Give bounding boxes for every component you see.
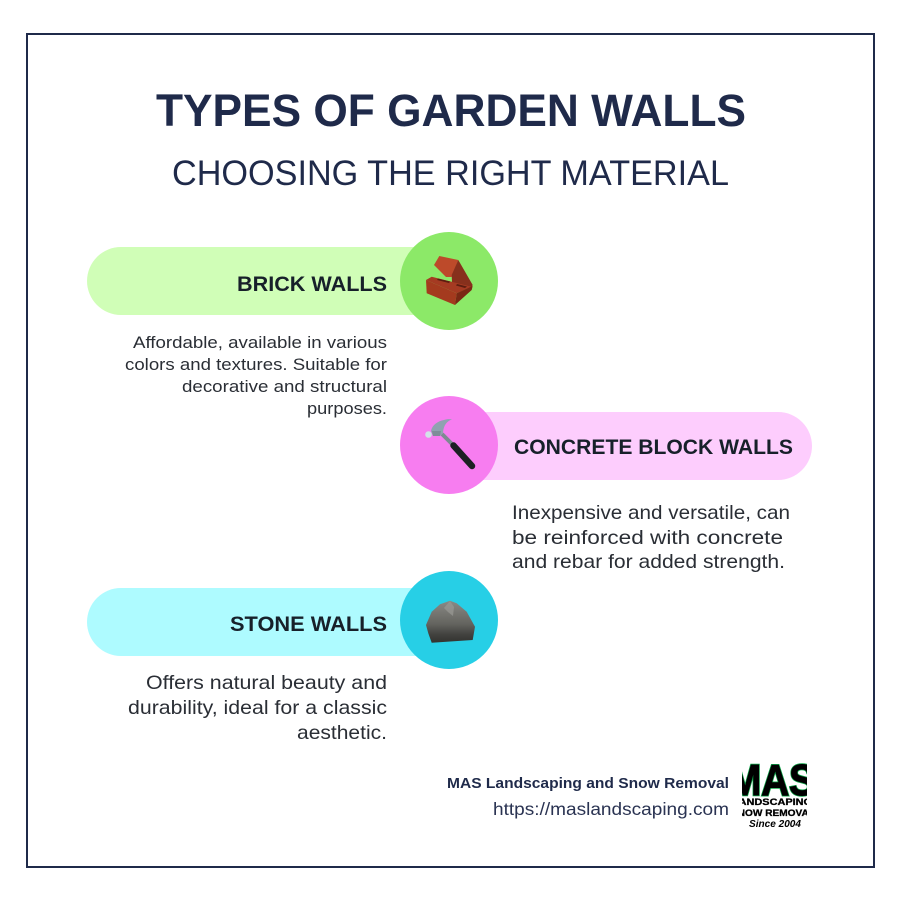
logo: MAS (729, 756, 815, 805)
icon: hammer (425, 419, 472, 466)
title: TYPES OF GARDEN WALLS (156, 85, 746, 136)
icon: stone (426, 601, 475, 643)
text: brick description: Affordable, available in various (133, 333, 387, 352)
text: brick description: purposes. (307, 399, 387, 418)
pill: concrete (450, 412, 812, 480)
icon circle: brick (400, 232, 498, 330)
text: stone description: durability, ideal for a classic (128, 697, 387, 719)
footer: company info: MAS Landscaping and Snow Removal (447, 775, 729, 792)
heading: brick walls: BRICK WALLS (237, 272, 387, 296)
panel: concrete block walls (400, 396, 812, 573)
logo: SNOW REMOVAL (731, 808, 815, 819)
text: concrete description: and rebar for added strength. (512, 551, 785, 573)
text: stone description: Offers natural beauty and (146, 672, 387, 694)
panel: brick walls (87, 232, 498, 418)
icon circle: stone (400, 571, 498, 669)
panel: stone walls (87, 571, 498, 744)
heading: stone walls: STONE WALLS (230, 612, 387, 636)
text: stone description (128, 672, 387, 744)
pill: stone (87, 588, 450, 656)
heading: concrete block walls: CONCRETE BLOCK WALLS (514, 435, 793, 459)
subtitle: CHOOSING THE RIGHT MATERIAL (172, 154, 729, 193)
logo: MAS (729, 756, 815, 805)
footer: company info: https://maslandscaping.com (493, 799, 729, 819)
text: brick description: decorative and structural (182, 377, 387, 396)
text: concrete description: be reinforced with concrete (512, 527, 783, 549)
icon circle: hammer (400, 396, 498, 494)
logo: LANDSCAPING (732, 797, 812, 808)
text: concrete description: Inexpensive and versatile, can (512, 502, 790, 524)
pill: brick (87, 247, 450, 315)
logo (742, 763, 807, 827)
text: brick description: colors and textures. Suitable for (125, 355, 387, 374)
logo: Since 2004 (749, 818, 801, 830)
text: stone description: aesthetic. (297, 722, 387, 744)
text: concrete description (512, 502, 790, 573)
icon: brick (426, 256, 473, 305)
text: brick description (125, 333, 387, 418)
footer: company info (447, 775, 729, 819)
